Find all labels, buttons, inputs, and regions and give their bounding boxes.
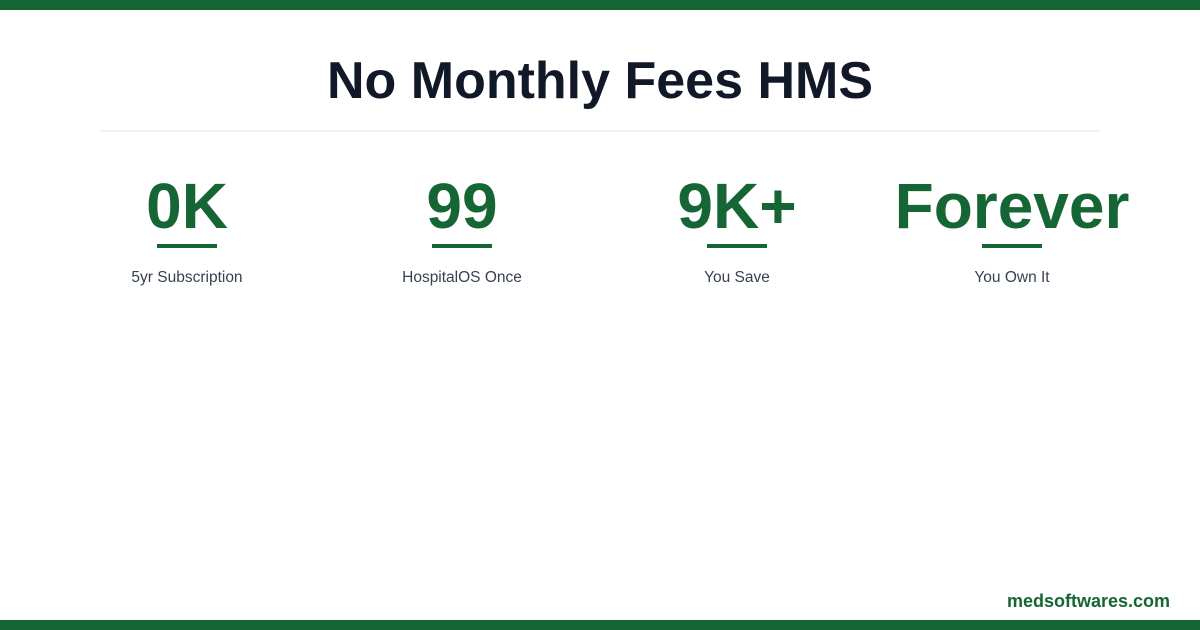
stat: you save: 9K+ (677, 170, 797, 242)
stat: you own it (895, 170, 1129, 286)
stat: HospitalOS once: HospitalOS Once (402, 269, 522, 286)
stat: 5yr subscription: 0K (146, 170, 228, 242)
stat: you save (677, 170, 797, 286)
stat: HospitalOS once (402, 170, 522, 286)
stat: you own it: You Own It (974, 269, 1050, 286)
title: No Monthly Fees HMS (327, 52, 873, 110)
stat: 5yr subscription (131, 170, 243, 286)
stat: HospitalOS once: 99 (426, 170, 498, 242)
stat: 5yr subscription: 5yr Subscription (131, 269, 243, 286)
footer url: medsoftwares.com (1007, 591, 1170, 611)
stat: you save: You Save (704, 269, 770, 286)
bottom bar (0, 620, 1200, 630)
top bar (0, 0, 1200, 10)
stat: you own it: Forever (895, 170, 1129, 242)
